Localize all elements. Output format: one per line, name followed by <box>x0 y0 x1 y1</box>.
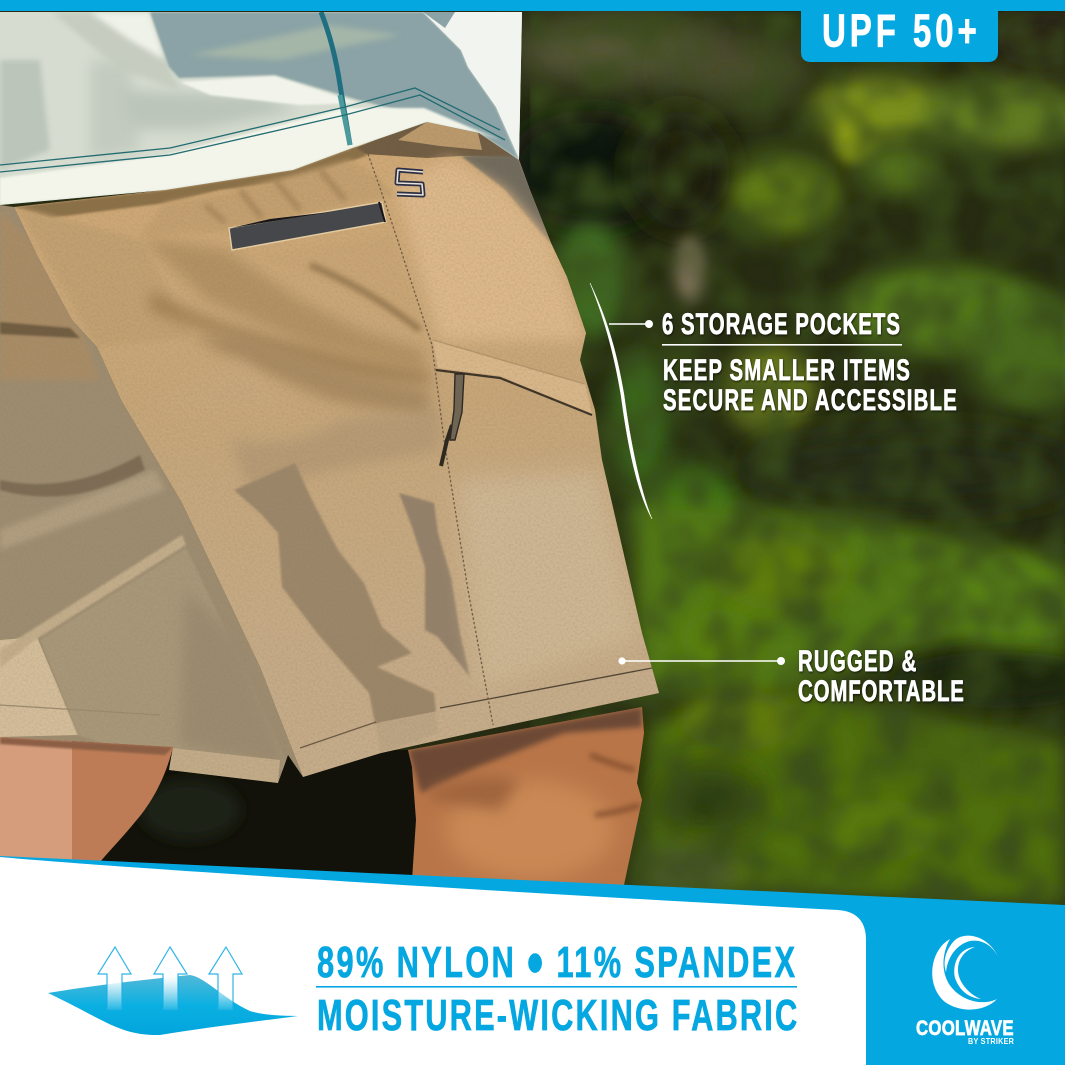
arrow three <box>209 947 242 1010</box>
fabric sheet <box>48 975 298 1035</box>
side shadow <box>461 156 553 245</box>
bottom blue band <box>0 856 1065 1065</box>
white bottom panel <box>0 857 866 1065</box>
zipper pull on cargo pocket <box>441 374 464 466</box>
connector with dot <box>609 323 648 325</box>
wave mark <box>932 936 998 1010</box>
badge: UPF 50+: UPF 50+ <box>822 6 977 57</box>
heading: 6 STORAGE POCKETS <box>662 308 900 341</box>
left leg <box>0 735 180 865</box>
pocket opening <box>436 370 592 415</box>
description line one: KEEP SMALLER ITEMS <box>663 354 910 387</box>
right leg <box>408 707 644 885</box>
shorts: back leg <box>0 200 310 800</box>
brand byline: BY STRIKER <box>968 1036 1014 1046</box>
logo: Coolwave by Striker <box>916 936 1014 1046</box>
tree shadow one <box>234 463 438 753</box>
divider <box>662 344 902 346</box>
embroidered S logo <box>397 170 423 195</box>
shorts: front leg <box>0 110 680 790</box>
teal seam <box>321 12 350 145</box>
hem stitching <box>0 88 500 165</box>
fabric composition heading: 89% NYLON <box>317 939 514 987</box>
heading line two: COMFORTABLE <box>798 675 964 708</box>
description line two: SECURE AND ACCESSIBLE <box>663 384 957 417</box>
hem band <box>297 667 659 777</box>
top blue bar <box>0 0 1065 11</box>
shirt <box>0 0 530 210</box>
arrow one <box>98 947 131 1010</box>
end dot <box>777 657 785 665</box>
start dot <box>618 657 626 665</box>
back pocket with dark zip panel <box>229 202 386 250</box>
connector line <box>622 660 780 662</box>
lit lower panel <box>455 470 640 690</box>
heading line one: RUGGED & <box>798 645 916 678</box>
cargo pocket flap <box>433 340 592 414</box>
callout: rugged and comfortable <box>618 645 964 708</box>
moisture-wicking heading: MOISTURE-WICKING FABRIC <box>317 992 797 1040</box>
lit fold left of pocket <box>19 206 163 347</box>
curved bracket line <box>590 283 652 519</box>
brand name: COOLWAVE <box>916 1017 1014 1041</box>
fabric composition heading: 11% SPANDEX <box>546 939 795 987</box>
lit side panel <box>395 158 585 340</box>
fabric composition heading: • <box>527 926 543 1000</box>
cast shadow <box>150 12 519 160</box>
bright hem strip <box>0 108 500 205</box>
wrinkled left panel <box>0 60 50 170</box>
callout: storage pockets <box>590 283 957 519</box>
icon: moisture-wicking fabric <box>48 947 298 1035</box>
tree shadow two <box>399 493 470 677</box>
arrow two <box>154 947 187 1010</box>
deep fold band <box>150 290 430 385</box>
waist shadow <box>350 120 520 158</box>
side seam <box>368 154 493 725</box>
heading divider <box>316 986 797 988</box>
right white sleeve area <box>423 12 522 165</box>
connector dot <box>645 320 653 328</box>
